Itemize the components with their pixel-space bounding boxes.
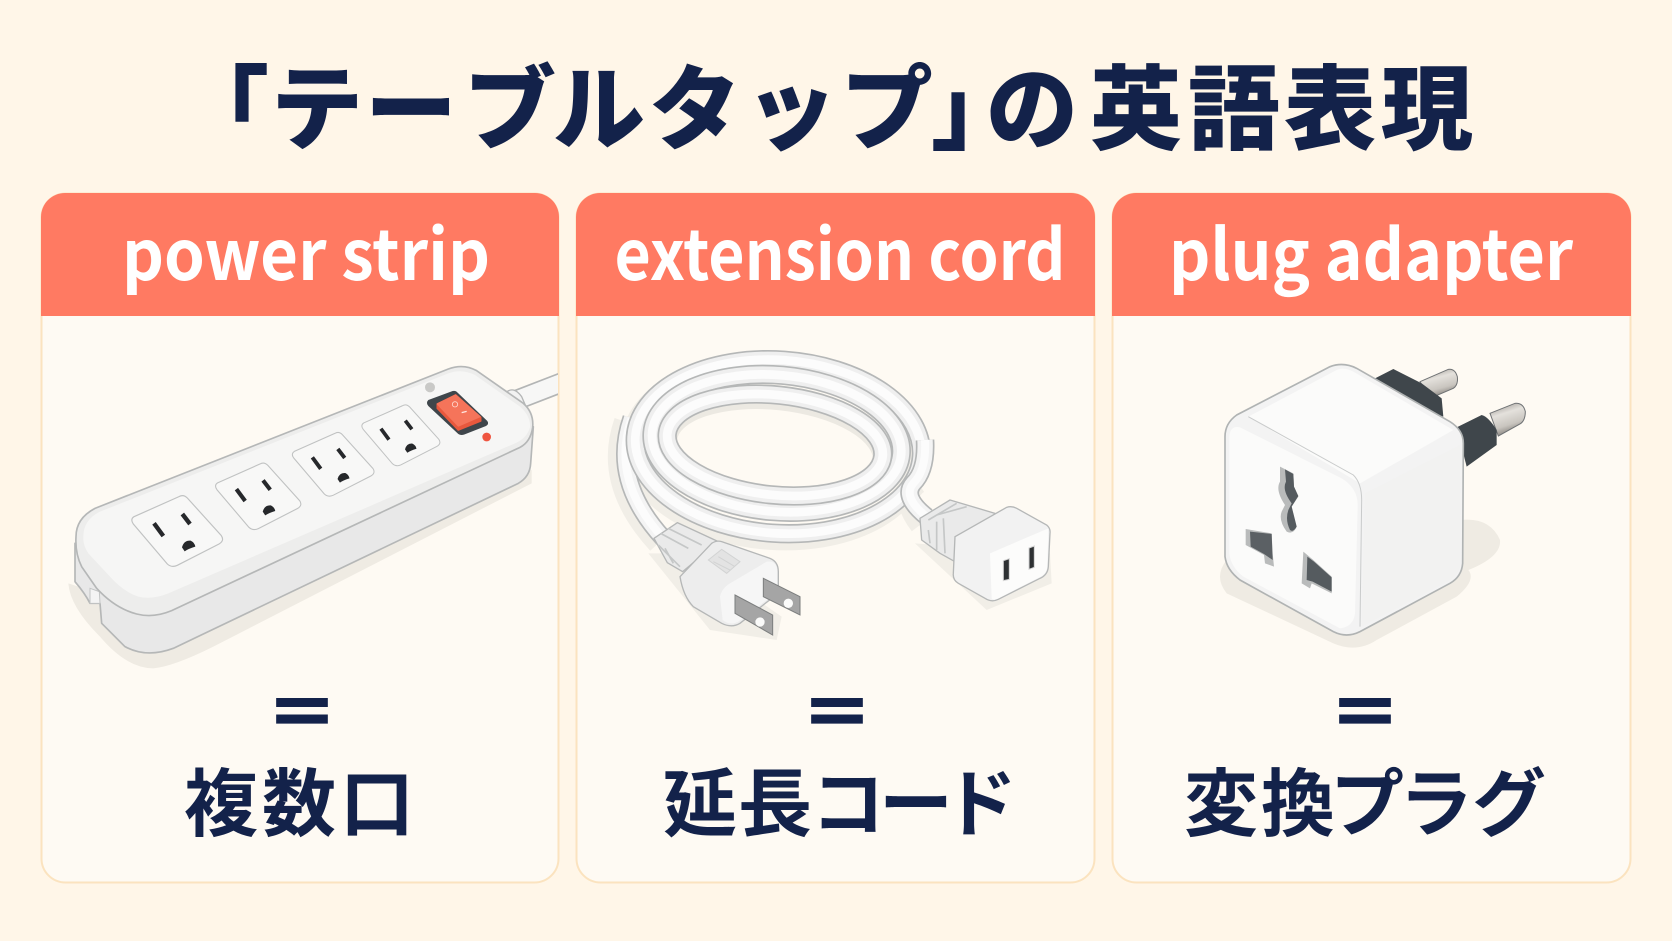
universal socket holes xyxy=(1246,467,1332,593)
equals sign: ＝ xyxy=(802,658,872,759)
rocker switch xyxy=(427,391,488,435)
english term: power strip xyxy=(122,200,490,301)
title: 「テーブルタップ」の英語表現 xyxy=(177,36,1473,169)
outlet 3 xyxy=(292,432,374,496)
plug xyxy=(654,523,800,635)
japanese meaning: 複数口 xyxy=(184,745,414,852)
panel: extension cord xyxy=(576,193,1095,882)
card header xyxy=(1112,193,1631,316)
english term: plug adapter xyxy=(1169,200,1573,301)
equals sign: ＝ xyxy=(267,658,337,759)
japanese meaning: 延長コード xyxy=(663,745,1017,852)
indicator lights xyxy=(425,382,491,441)
adapter body xyxy=(1225,365,1463,635)
cord tail to plug xyxy=(625,418,663,538)
outlet 4 xyxy=(362,405,440,466)
plug pins xyxy=(1375,369,1525,467)
equals sign: ＝ xyxy=(1330,658,1400,759)
card body xyxy=(42,194,558,882)
icon: extension cord xyxy=(619,350,1052,640)
card body xyxy=(1112,194,1630,882)
english term: extension cord xyxy=(614,200,1066,301)
socket connector xyxy=(920,500,1050,601)
cord tail to socket xyxy=(910,440,927,517)
panel: power strip xyxy=(41,193,567,882)
card body xyxy=(576,194,1094,882)
cord shadow xyxy=(619,355,1052,640)
coil xyxy=(629,350,927,543)
outlet 1 xyxy=(132,496,223,566)
panel: plug adapter xyxy=(1112,193,1631,882)
card header xyxy=(41,193,559,316)
japanese meaning: 変換プラグ xyxy=(1184,745,1546,852)
outlet 2 xyxy=(216,463,301,530)
icon: power strip xyxy=(68,367,567,668)
card header xyxy=(576,193,1095,316)
icon: plug adapter xyxy=(1220,365,1525,648)
